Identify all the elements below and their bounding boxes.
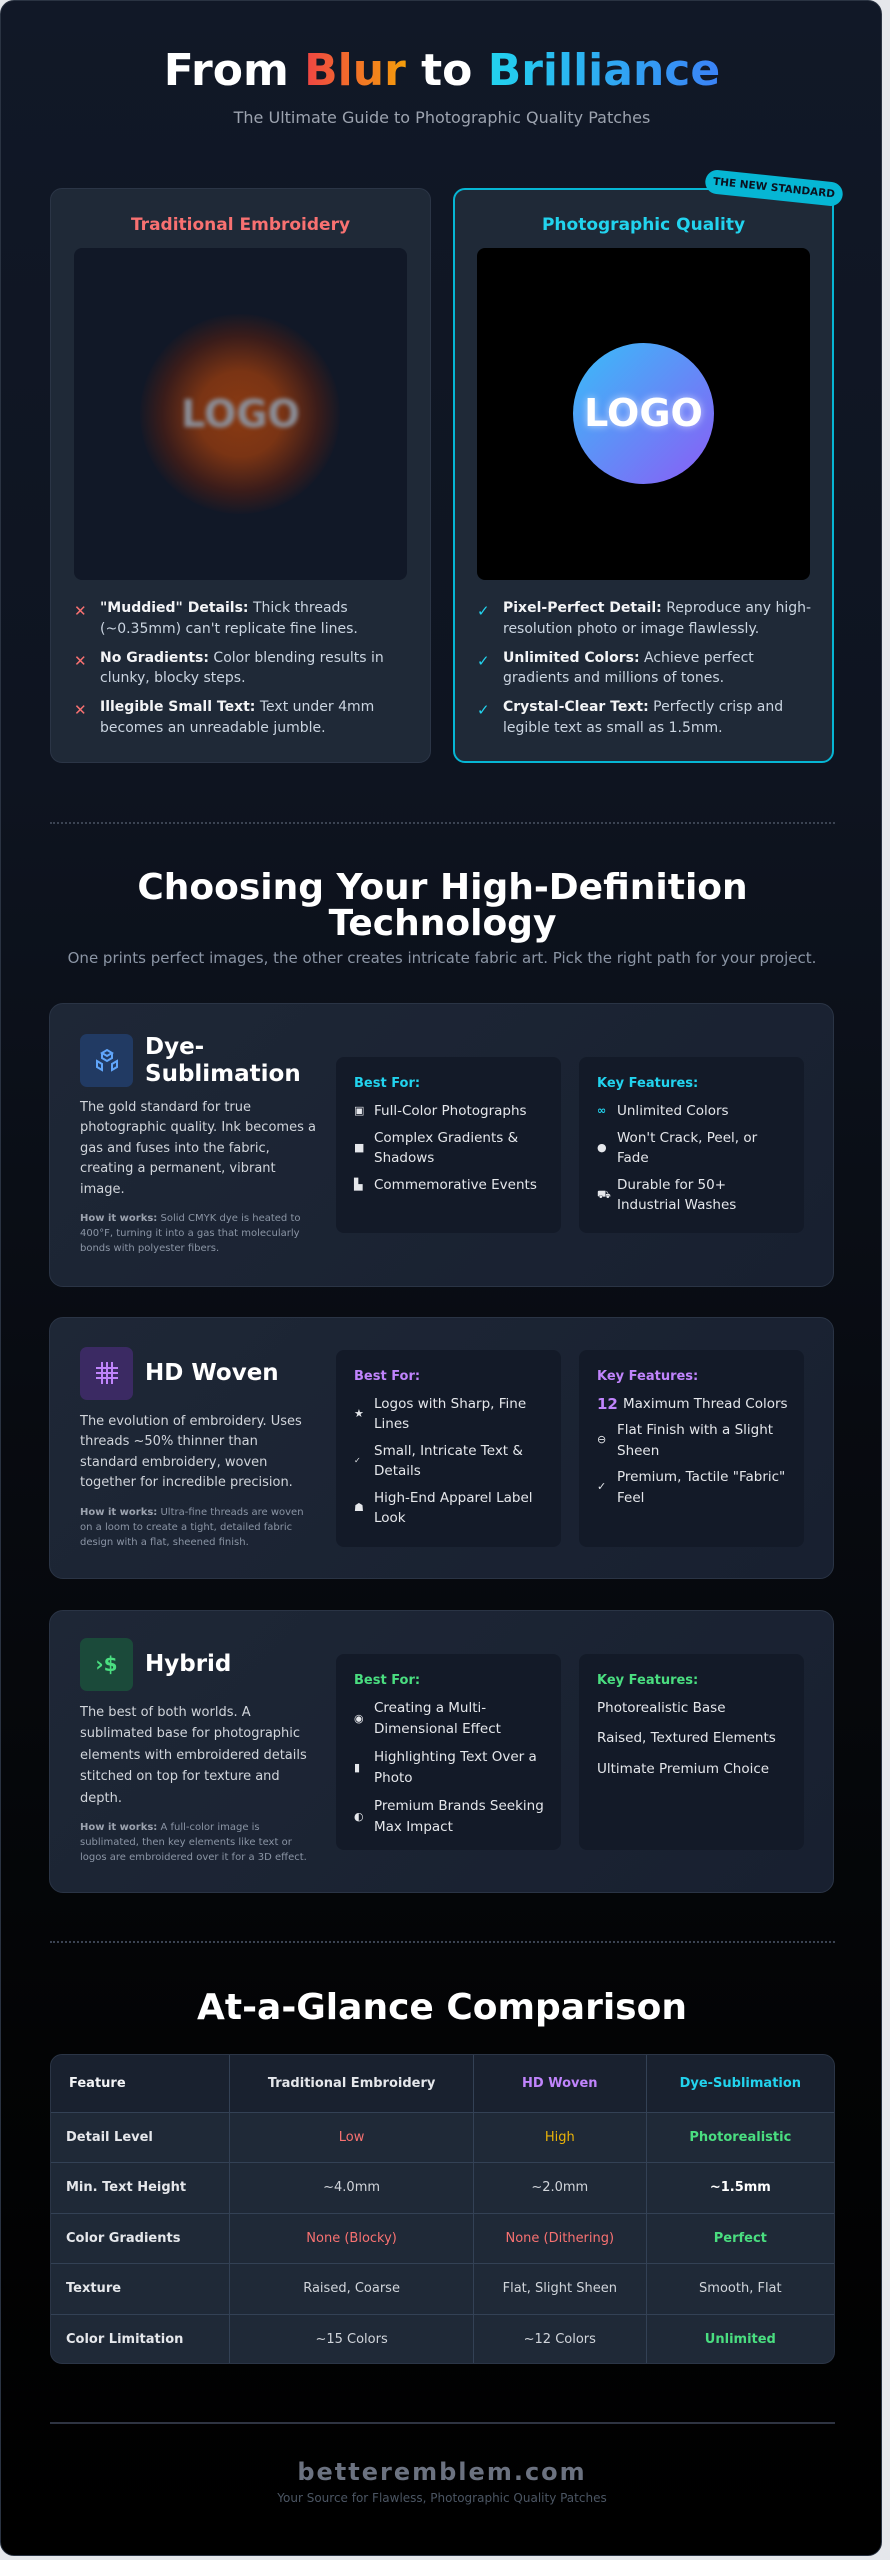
table: comparison: Color Gradients xyxy=(66,2230,180,2246)
box: key features hybrid xyxy=(579,1654,804,1850)
panel: traditional embroidery xyxy=(50,188,431,763)
image: blurry logo: LOGO xyxy=(181,392,300,436)
icon: hybrid: ›$ xyxy=(95,1652,118,1676)
box: key features dye: Durable for 50+ Industrial Washes xyxy=(617,1176,736,1213)
image: crisp logo: LOGO xyxy=(584,391,703,435)
box: best for dye: Full-Color Photographs xyxy=(374,1103,527,1119)
table: comparison: None (Blocky) xyxy=(306,2230,397,2246)
box: key features woven: Maximum Thread Colors xyxy=(623,1396,788,1412)
box: key features dye: Key Features: xyxy=(597,1076,698,1091)
list: drawbacks: "Muddied" Details: Thick threads (~0.35mm) can't replicate fine lines. xyxy=(100,600,358,636)
text: hybrid intro: Hybrid xyxy=(145,1651,231,1677)
list: benefits: ✓ xyxy=(477,701,490,719)
image: blurry logo xyxy=(74,248,407,580)
box: best for woven: ☗ xyxy=(354,1501,364,1514)
box: key features hybrid: Ultimate Premium Choice xyxy=(597,1760,769,1776)
icon: grid xyxy=(80,1346,133,1400)
table: comparison: Raised, Coarse xyxy=(303,2281,400,2296)
box: best for woven xyxy=(336,1350,561,1546)
text: woven intro: HD Woven xyxy=(145,1360,279,1386)
box: key features dye: ⛟ xyxy=(597,1188,611,1201)
text: dye intro: Sublimation xyxy=(145,1061,301,1087)
table: comparison: Feature xyxy=(69,2076,126,2091)
list: benefits: ✓ xyxy=(477,652,490,670)
box: best for hybrid: Premium Brands Seeking Max Impact xyxy=(374,1798,544,1835)
table: comparison: Photorealistic xyxy=(689,2130,791,2144)
list: drawbacks: No Gradients: Color blending results in clunky, blocky steps. xyxy=(100,650,384,686)
box: key features woven: 12 xyxy=(597,1394,618,1412)
box: best for woven: High-End Apparel Label Look xyxy=(374,1490,533,1526)
box: best for dye: Best For: xyxy=(354,1076,420,1091)
list: benefits: ✓ xyxy=(477,602,490,620)
box: best for woven: Logos with Sharp, Fine Lines xyxy=(374,1396,526,1432)
heading: choosing technology: Choosing Your High-Definition Technology xyxy=(137,867,748,944)
box: key features dye xyxy=(579,1057,804,1233)
table: comparison: Texture xyxy=(66,2281,121,2296)
panel: photographic quality xyxy=(453,188,834,763)
table: comparison: Min. Text Height xyxy=(66,2180,186,2195)
table: comparison: Unlimited xyxy=(705,2332,776,2347)
table: comparison: Detail Level xyxy=(66,2130,153,2144)
panel: dye-sublimation xyxy=(49,1003,834,1287)
icon: hybrid xyxy=(80,1638,133,1691)
box: key features dye: ● xyxy=(597,1141,607,1154)
box: best for dye: ■ xyxy=(354,1141,364,1154)
heading: comparison: At-a-Glance Comparison xyxy=(197,1987,687,2028)
box: best for hybrid: Highlighting Text Over a Photo xyxy=(374,1748,537,1786)
subtitle: The Ultimate Guide to Photographic Quality Patches xyxy=(234,108,650,127)
box: key features woven xyxy=(579,1350,804,1546)
title: From Blur to Brilliance xyxy=(164,45,720,96)
box: best for dye: ▙ xyxy=(354,1178,362,1190)
box: key features woven: ⊖ xyxy=(597,1433,606,1446)
table: comparison: Low xyxy=(339,2130,364,2144)
box: best for hybrid: ◉ xyxy=(354,1712,364,1725)
table: comparison: Perfect xyxy=(714,2230,767,2246)
box: key features dye: ∞ xyxy=(597,1104,606,1117)
box: key features hybrid: Raised, Textured Elements xyxy=(597,1730,776,1746)
subheading: One prints perfect images, the other creates intricate fabric art. Pick the right path for your project. xyxy=(68,949,816,967)
box: key features dye: Won't Crack, Peel, or Fade xyxy=(617,1130,757,1166)
box: key features woven: Key Features: xyxy=(597,1368,698,1384)
box: best for woven: Best For: xyxy=(354,1368,420,1384)
box: best for dye: Complex Gradients & Shadows xyxy=(374,1130,518,1166)
list: drawbacks: Illegible Small Text: Text under 4mm becomes an unreadable jumble. xyxy=(100,699,374,736)
heading: photographic: Photographic Quality xyxy=(542,215,745,235)
box: key features woven: ✓ xyxy=(597,1480,606,1493)
icon: cubes xyxy=(80,1034,133,1087)
table: comparison: Traditional Embroidery xyxy=(268,2076,435,2091)
box: best for dye: ▣ xyxy=(354,1104,364,1117)
list: drawbacks: ✕ xyxy=(74,701,87,719)
table: comparison: None (Dithering) xyxy=(505,2230,614,2246)
box: best for hybrid: ▮ xyxy=(354,1761,360,1774)
table: comparison: Color Limitation xyxy=(66,2332,183,2347)
text: hybrid intro: The best of both worlds. A sublimated base for photographic elements with embroidered details stitched on top for texture and depth. xyxy=(80,1705,307,1806)
table: comparison: Dye-Sublimation xyxy=(680,2076,801,2091)
text: woven intro: How it works: Ultra-fine threads are woven on a loom to create a tight, detailed fabric design with a flat, sheened finish. xyxy=(80,1506,304,1548)
text: hybrid intro: How it works: A full-color image is sublimated, then key elements like text or logos are embroidered over it for a 3D effect. xyxy=(80,1822,307,1863)
box: key features hybrid: Key Features: xyxy=(597,1672,698,1688)
table: comparison: ~4.0mm xyxy=(323,2180,380,2195)
box: key features hybrid: Photorealistic Base xyxy=(597,1700,726,1716)
box: key features woven: Flat Finish with a Slight Sheen xyxy=(617,1422,773,1458)
heading: traditional: Traditional Embroidery xyxy=(131,215,350,235)
box: best for hybrid: Creating a Multi-Dimensional Effect xyxy=(374,1700,501,1737)
image: crisp logo xyxy=(477,248,810,580)
panel: hd woven xyxy=(49,1317,834,1579)
panel: hybrid xyxy=(49,1610,834,1893)
table: comparison: ~15 Colors xyxy=(315,2332,388,2347)
box: best for dye: Commemorative Events xyxy=(374,1176,537,1192)
box: key features dye: Unlimited Colors xyxy=(617,1103,729,1119)
list: benefits xyxy=(477,600,811,736)
box: best for hybrid xyxy=(336,1654,561,1850)
table: comparison: HD Woven xyxy=(522,2076,598,2091)
box: best for woven: ★ xyxy=(354,1407,364,1420)
text: hybrid intro xyxy=(80,1638,307,1863)
list: benefits: Unlimited Colors: Achieve perfect gradients and millions of tones. xyxy=(503,650,754,686)
box: best for woven: ✓ xyxy=(354,1456,361,1465)
list: drawbacks: ✕ xyxy=(74,602,87,620)
table: comparison: High xyxy=(545,2130,575,2144)
table: comparison: ~1.5mm xyxy=(710,2180,771,2195)
box: key features woven: Premium, Tactile "Fabric" Feel xyxy=(617,1469,785,1506)
box: best for dye xyxy=(336,1057,561,1233)
footer: tagline: Your Source for Flawless, Photographic Quality Patches xyxy=(277,2491,607,2505)
box: best for hybrid: ◐ xyxy=(354,1810,364,1823)
table: comparison xyxy=(50,2054,835,2364)
badge: new standard xyxy=(704,169,844,207)
table: comparison: ~12 Colors xyxy=(524,2332,596,2347)
list: drawbacks: ✕ xyxy=(74,652,87,670)
list: benefits: Pixel-Perfect Detail: Reproduce any high-resolution photo or image flawlessly. xyxy=(503,600,811,636)
text: woven intro: The evolution of embroidery. Uses threads ~50% thinner than standard embroidery, woven together for incredible precision. xyxy=(80,1414,302,1490)
table: comparison: ~2.0mm xyxy=(531,2180,588,2195)
list: benefits: Crystal-Clear Text: Perfectly crisp and legible text as small as 1.5mm. xyxy=(503,699,783,736)
text: dye intro: Dye- xyxy=(145,1034,204,1060)
footer: brand: betteremblem.com xyxy=(297,2458,587,2486)
text: dye intro: The gold standard for true photographic quality. Ink becomes a gas and fuses into the fabric, creating a permanent, vibrant image. xyxy=(80,1100,316,1197)
list: drawbacks xyxy=(74,600,384,736)
badge: new standard: THE NEW STANDARD xyxy=(712,176,836,200)
text: dye intro xyxy=(80,1034,316,1254)
text: dye intro: How it works: Solid CMYK dye is heated to 400°F, turning it into a gas that molecularly bonds with polyester fibers. xyxy=(80,1213,300,1254)
box: best for hybrid: Best For: xyxy=(354,1672,420,1688)
text: woven intro xyxy=(80,1347,304,1548)
table: comparison: Flat, Slight Sheen xyxy=(503,2281,617,2296)
box: best for woven: Small, Intricate Text & Details xyxy=(374,1442,523,1479)
table: comparison: Smooth, Flat xyxy=(699,2281,782,2296)
